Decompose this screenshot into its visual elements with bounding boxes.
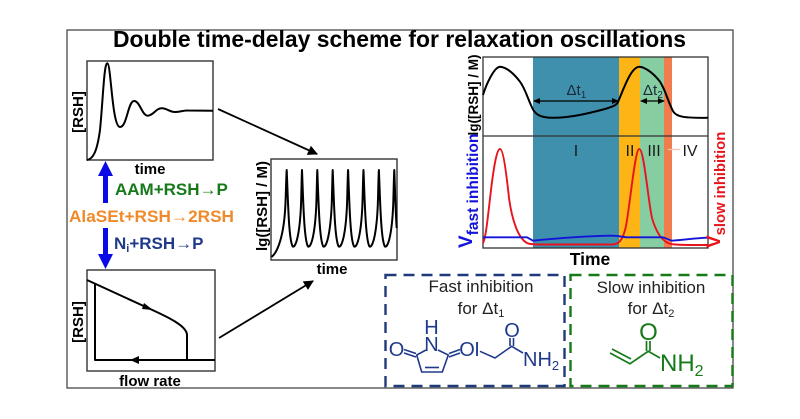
y-axis label: slow inhibition rate: slow inhibition [713, 132, 729, 235]
panel: fast inhibition: Fast inhibition [429, 277, 533, 296]
delta t2 arrow: Δt [643, 82, 657, 99]
phase labels: IV [682, 143, 698, 160]
panel: slow inhibition: 2 [668, 308, 674, 320]
slow inhibition rate curve [483, 149, 708, 245]
panel: hysteresis loop: [RSH] [70, 301, 87, 343]
delta t1 arrow: 1 [581, 90, 587, 101]
phase labels [574, 143, 698, 160]
delta t1 arrow [534, 82, 618, 101]
panel: damped oscillation: time [135, 161, 165, 178]
panel: relaxation oscillations: time [317, 261, 347, 278]
phase labels: I [574, 143, 578, 160]
molecule: acrylamide: NH [660, 350, 695, 377]
panel: slow inhibition [570, 275, 732, 386]
phase IV band [664, 57, 672, 248]
panel: relaxation oscillations [254, 159, 397, 278]
molecule: acrylamide: O [639, 319, 658, 346]
molecule: maleimide inhibitor: O [504, 320, 520, 342]
panel: slow inhibition: Slow inhibition [597, 278, 705, 297]
phase III band [640, 57, 664, 248]
y-axis label: fast inhibition rate: V [456, 235, 477, 248]
arrow: up to damped oscillation [98, 161, 113, 203]
reaction: Ni: +RSH→P [129, 234, 204, 253]
y-axis label: RSH: lg([RSH] / M) [466, 55, 481, 135]
chart frame [483, 57, 708, 248]
phase labels: III [647, 143, 661, 160]
molecule: maleimide inhibitor: N [424, 334, 439, 356]
panel: relaxation oscillations: lg([RSH] / M) [254, 161, 271, 251]
molecule: acrylamide [610, 319, 704, 380]
arrow: hysteresis to oscillations [219, 281, 313, 338]
molecule: maleimide inhibitor: 2 [552, 358, 559, 373]
molecule: acrylamide: 2 [695, 363, 704, 380]
molecule: maleimide inhibitor [389, 317, 559, 373]
molecule: maleimide inhibitor: O [389, 339, 404, 361]
reaction: Ni: N [114, 234, 126, 253]
delta t2 arrow: 2 [657, 90, 663, 101]
reaction: AlaSEt: AlaSEt+RSH→2RSH [69, 207, 234, 226]
y-axis label: slow inhibition rate: V [704, 235, 725, 248]
phase II band [619, 57, 640, 248]
title: Double time-delay scheme for relaxation oscillations [113, 26, 686, 52]
arrow: down to hysteresis [98, 228, 113, 269]
x-axis label: Time: Time [570, 249, 611, 269]
molecule: maleimide inhibitor: H [424, 317, 439, 339]
molecule: maleimide inhibitor: O [459, 339, 475, 361]
reaction: Ni: i [126, 243, 129, 255]
panel: slow inhibition: for Δt [628, 299, 668, 318]
panel: fast inhibition [386, 275, 564, 386]
panel: damped oscillation: [RSH] [70, 91, 87, 133]
panel: hysteresis loop: flow rate [119, 373, 181, 390]
delta t2 arrow [641, 82, 664, 101]
delta t1 arrow: Δt [566, 82, 581, 99]
phase labels: II [626, 143, 634, 160]
panel: hysteresis loop [70, 270, 215, 390]
panel: time-delay phase chart [483, 57, 708, 248]
y-axis label: fast inhibition rate: fast inhibition [465, 134, 482, 235]
molecule: maleimide inhibitor: NH [523, 349, 552, 371]
fast inhibition rate curve [483, 236, 708, 241]
panel: fast inhibition: 1 [498, 308, 504, 320]
molecule: maleimide inhibitor: I [474, 339, 480, 361]
arrow: damped to oscillations [218, 109, 317, 154]
RSH concentration curve [483, 67, 708, 118]
outer frame [67, 30, 733, 388]
panel: fast inhibition: for Δt [458, 299, 498, 318]
reaction: AAM: AAM+RSH→P [115, 180, 228, 199]
panel: damped oscillation [70, 61, 213, 178]
phase I band [533, 57, 619, 248]
